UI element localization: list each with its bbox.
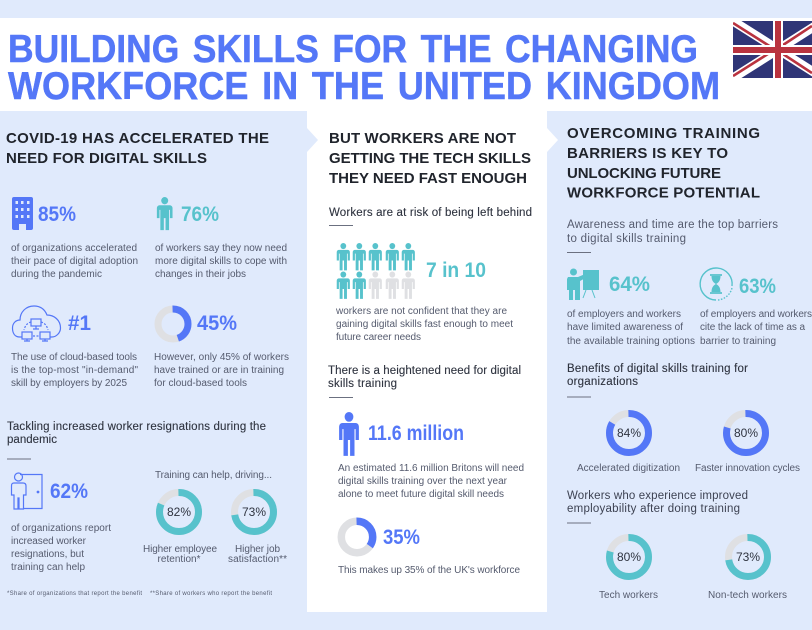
footnotes: *Share of organizations that report the benefit (7, 591, 142, 597)
chart: 73% donut teal: 73% (736, 550, 760, 564)
text: 85% description: of organizations accelerated (11, 243, 137, 254)
chart: 84% donut (610, 414, 648, 452)
label: accelerated digitization: Accelerated digitization (577, 463, 680, 474)
title (8, 28, 720, 108)
text: 63% description (700, 309, 812, 347)
text: 7 in 10 description: gaining digital skills fast enough to meet (336, 319, 513, 330)
heading: workers not getting skills (329, 130, 531, 187)
text: 62% description: resignations, but (11, 549, 84, 560)
heading: resignations: Tackling increased worker resignations during the (7, 421, 266, 433)
heading: overcoming barriers: BARRIERS IS KEY TO (567, 145, 728, 162)
text: 64% description: have limited awareness of (567, 322, 683, 333)
text: 76% description: of workers say they now need (155, 243, 287, 254)
stat: 45%: 45% (197, 312, 237, 335)
label: employee retention: retention* (158, 554, 201, 565)
icon: worker (157, 197, 173, 230)
heading: overcoming barriers: WORKFORCE POTENTIAL (567, 184, 760, 202)
text: 62% description (11, 523, 111, 573)
icon: union flag (733, 21, 812, 78)
subheading: benefits: organizations (567, 376, 638, 388)
subheading: top barriers: to digital skills training (567, 233, 686, 245)
label: faster innovation: Faster innovation cycles (695, 463, 800, 474)
subheading: employability (567, 490, 748, 515)
text: 64% description: of employers and workers (567, 309, 681, 320)
text: 76% description: changes in their jobs (155, 269, 246, 280)
heading: resignations (7, 421, 266, 446)
text: 7 in 10 description (335, 306, 513, 343)
chart: 35% donut (341, 521, 373, 553)
subheading: heightened need: There is a heightened need for digital (328, 365, 521, 377)
heading: overcoming barriers: UNLOCKING FUTURE (567, 165, 721, 182)
icon: person leaving through door (12, 473, 42, 509)
subheading: benefits: Benefits of digital skills training for (567, 363, 748, 375)
stat: 62%: 62% (50, 480, 88, 503)
text: 85% description: during the pandemic (11, 269, 102, 280)
text: 63% description: of employers and workers (700, 309, 812, 320)
text: cloud description (11, 352, 138, 389)
title: BUILDING SKILLS FOR THE CHANGING (8, 28, 698, 71)
text: 76% description: more digital skills to cope with (155, 256, 287, 267)
panel: middle column background (307, 111, 558, 612)
label: job satisfaction: Higher job (235, 544, 280, 555)
title banner (0, 18, 812, 111)
subheading: heightened need: skills training (328, 378, 397, 390)
text: 76% description (155, 243, 287, 280)
icon: presenter at board (567, 268, 599, 300)
chart: 84% donut: 84% (617, 426, 641, 440)
footnotes: **Share of workers who report the benefit (150, 591, 272, 597)
text: 64% description: the available training options (567, 336, 695, 347)
text: 35% description: This makes up 35% of the UK's workforce (338, 565, 520, 576)
label: tech workers: Tech workers (599, 590, 658, 601)
heading: overcoming barriers (567, 125, 760, 202)
title: WORKFORCE IN THE UNITED KINGDOM (8, 65, 720, 108)
subheading: left behind: Workers are at risk of being left behind (329, 207, 532, 219)
stat: 11.6 million: 11.6 million (368, 422, 464, 445)
chart: 45% donut (158, 309, 188, 339)
text: 11.6 million description (338, 463, 524, 500)
text: 11.6 million description: An estimated 11.6 million Britons will need (338, 463, 524, 474)
chart: 73% donut: 73% (242, 505, 266, 519)
label: employee retention (143, 544, 217, 565)
icon: pictogram 7 of 10 workers (337, 243, 415, 299)
text: 11.6 million description: digital skills training over the next year (338, 476, 508, 487)
subheading: employability: Workers who experience improved (567, 490, 748, 502)
icon: office building (12, 197, 33, 230)
icon: cloud network (12, 306, 60, 341)
icon: hourglass in dial (700, 268, 732, 300)
stat: 63%: 63% (739, 275, 776, 298)
stat: 76%: 76% (181, 203, 219, 226)
text: 85% description: their pace of digital adoption (11, 256, 138, 267)
text: cloud description: The use of cloud-based tools (11, 352, 137, 363)
stat: 85%: 85% (38, 203, 76, 226)
subheading: top barriers (567, 219, 778, 245)
label: job satisfaction (228, 544, 287, 565)
heading: covid: COVID-19 HAS ACCELERATED THE (6, 130, 269, 147)
heading: overcoming barriers: OVERCOMING TRAINING (567, 125, 760, 142)
chart: 82% donut (160, 492, 198, 532)
chart: 80% donut blue: 80% (734, 426, 758, 440)
text: 63% description: barrier to training (700, 336, 776, 347)
label: job satisfaction: satisfaction** (228, 554, 287, 565)
chart: 73% donut teal (728, 538, 768, 576)
heading: workers not getting skills: GETTING THE TECH SKILLS (329, 150, 531, 167)
text: 11.6 million description: alone to meet future digital skill needs (338, 489, 504, 500)
heading: resignations: pandemic (7, 434, 57, 446)
text: cloud description: is the top-most "in-demand" (11, 365, 138, 376)
text: 62% description: of organizations report (11, 523, 111, 534)
chart: 80% donut blue (726, 414, 766, 452)
text: training can help: Training can help, driving... (155, 470, 272, 481)
panel: workers not getting skills (328, 130, 532, 576)
heading: covid: NEED FOR DIGITAL SKILLS (6, 150, 207, 167)
subheading: heightened need (328, 365, 521, 390)
stat: 64%: 64% (609, 273, 650, 296)
text: 45% description (154, 352, 289, 389)
footnotes (7, 591, 272, 597)
text: 85% description (11, 243, 138, 280)
text: 62% description: increased worker (11, 536, 87, 547)
text: 45% description: for cloud-based tools (154, 378, 247, 389)
text: 7 in 10 description: workers are not confident that they are (335, 306, 507, 317)
text: 62% description: training can help (11, 562, 85, 573)
text: 7 in 10 description: future career needs (336, 332, 421, 343)
stat: #1: #1 (68, 312, 91, 335)
chart: 82% donut: 82% (167, 505, 191, 519)
text: 45% description: have trained or are in training (154, 365, 284, 376)
panel: covid accelerated digital skills (6, 130, 289, 389)
icon: large blue worker (339, 412, 359, 456)
chart: 73% donut (234, 492, 274, 532)
subheading: benefits (567, 363, 748, 388)
heading: workers not getting skills: BUT WORKERS ARE NOT (329, 130, 516, 147)
stat: 7 in 10: 7 in 10 (426, 259, 486, 282)
panel: tackling resignations (7, 421, 287, 597)
subheading: top barriers: Awareness and time are the top barriers (567, 219, 778, 231)
text: 63% description: cite the lack of time as a (700, 322, 805, 333)
text: 64% description (567, 309, 695, 347)
heading: covid (6, 130, 269, 167)
label: employee retention: Higher employee (143, 544, 217, 555)
heading: workers not getting skills: THEY NEED FAST ENOUGH (329, 170, 527, 187)
stat: 35%: 35% (383, 526, 420, 549)
subheading: employability: employability after doing training (567, 503, 740, 515)
panel: overcoming training barriers (567, 125, 812, 601)
text: 45% description: However, only 45% of workers (154, 352, 289, 363)
chart: 80% donut teal: 80% (617, 550, 641, 564)
chart: 80% donut teal (610, 538, 648, 576)
label: non-tech workers: Non-tech workers (708, 590, 787, 601)
text: cloud description: skill by employers by 2025 (11, 378, 127, 389)
